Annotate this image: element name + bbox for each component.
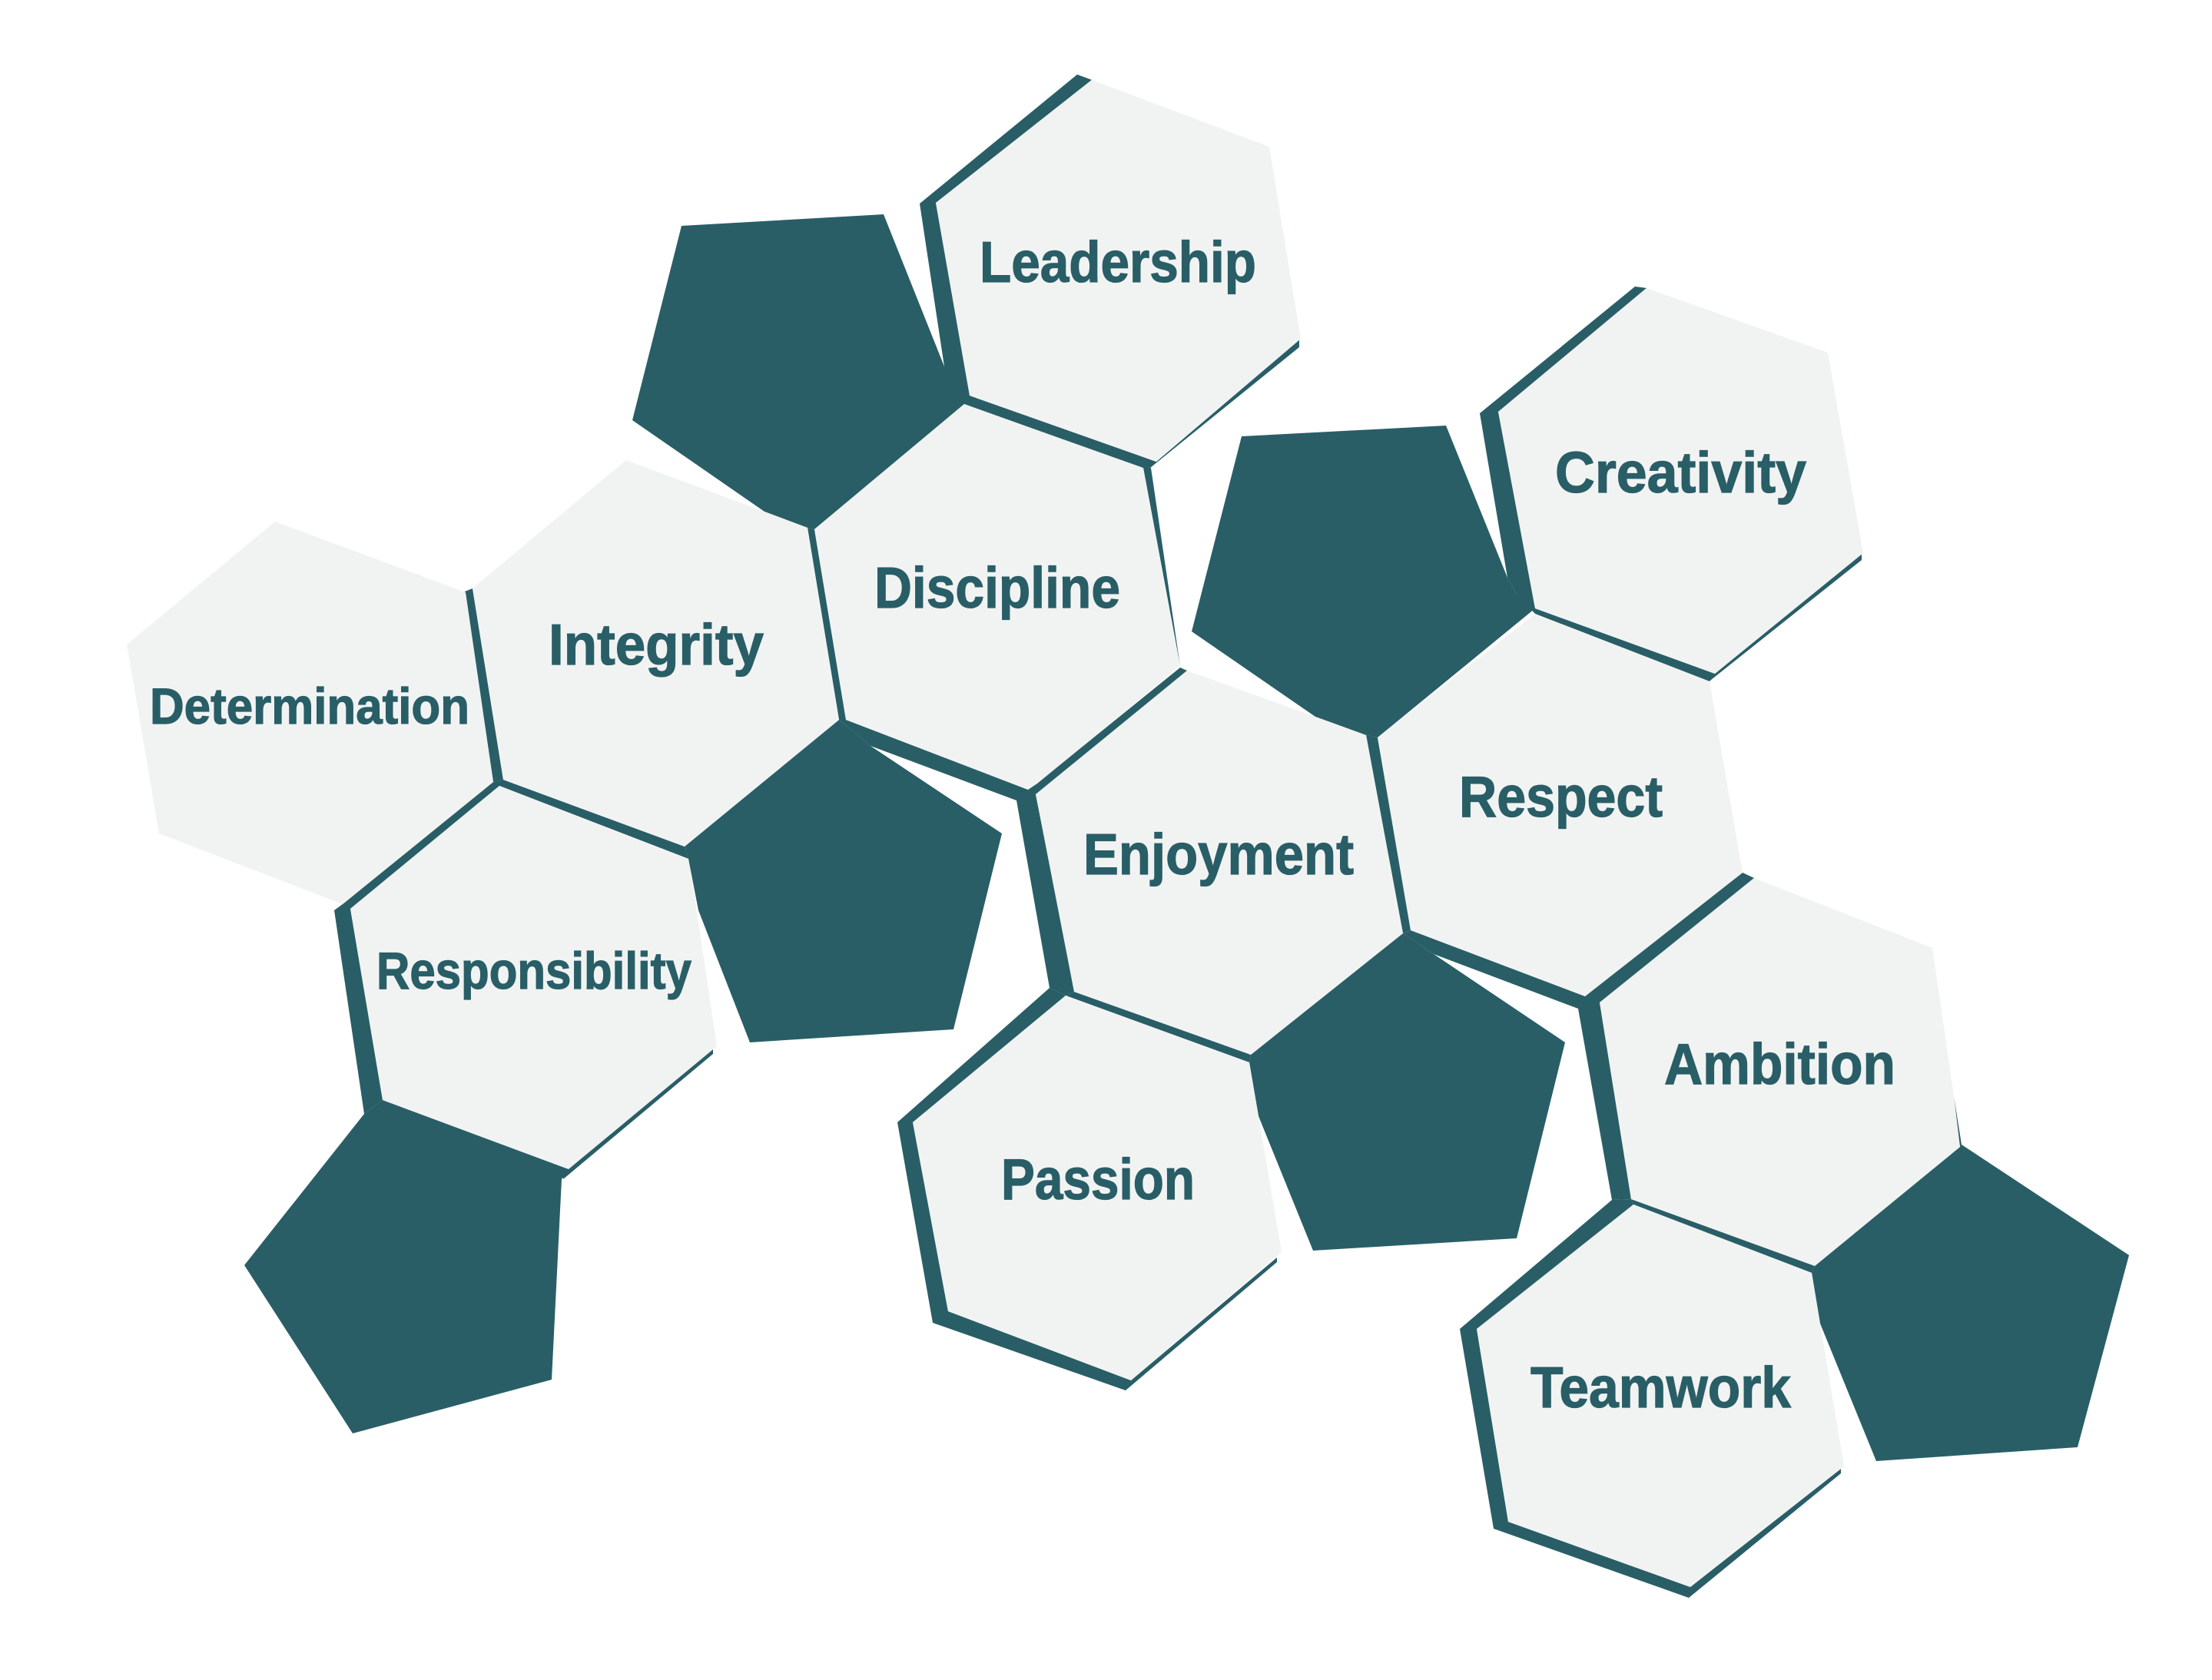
strip: responsibility (334, 780, 688, 1114)
panel: Enjoyment (1036, 671, 1403, 1055)
strip: discipline right (1143, 468, 1180, 666)
panel: Teamwork: Teamwork (1530, 1355, 1791, 1420)
strip: respect bottom (1403, 930, 1600, 1009)
strip: discipline bottom (839, 720, 1036, 800)
panel: Determination: Determination (150, 678, 469, 734)
panel: Creativity: Creativity (1555, 440, 1806, 505)
panel: Teamwork (1477, 1204, 1844, 1587)
dark pentagons (244, 214, 2129, 1461)
panel: Integrity (473, 460, 839, 847)
pentagon: below responsibility (244, 1100, 569, 1433)
panel: Discipline (814, 404, 1180, 790)
panel: Enjoyment: Enjoyment (1083, 822, 1354, 886)
pentagon: upper centre (1192, 426, 1535, 737)
panel: Leadership (936, 80, 1301, 462)
strip: teamwork (1460, 1199, 1841, 1598)
panel: Ambition: Ambition (1664, 1032, 1895, 1096)
strip: enjoyment respect divider (1366, 735, 1411, 933)
strip: creativity (1480, 287, 1862, 681)
panel: Integrity: Integrity (549, 612, 764, 677)
panel: Passion (913, 996, 1282, 1380)
strip: ambition (1578, 873, 1754, 1200)
panel: Determination (127, 522, 493, 904)
panel: Ambition (1600, 878, 1960, 1266)
strip: integrity discipline divider (808, 528, 846, 720)
panel: Creativity (1498, 288, 1863, 674)
pentagon: top left (632, 214, 970, 529)
panel: Respect: Respect (1459, 764, 1663, 829)
strip: responsibility lower right (562, 1049, 713, 1179)
panel: Responsibility (350, 786, 717, 1169)
dark hexagon edge strips (334, 75, 1962, 1598)
pentagon: bottom right (1812, 1145, 2129, 1461)
strip: ambition bottom line (1631, 1199, 1815, 1273)
strip: leadership (920, 75, 1299, 469)
panel: Responsibility: Responsibility (376, 942, 691, 1000)
panel: Discipline: Discipline (874, 555, 1120, 620)
panel: Respect (1378, 614, 1743, 996)
pentagon: below integrity (685, 720, 1002, 1042)
panel: Leadership: Leadership (980, 230, 1256, 294)
strip: enjoyment bottom line (1066, 992, 1251, 1062)
strip: passion (897, 988, 1277, 1390)
strip: enjoyment (1016, 668, 1187, 996)
panel: Passion: Passion (1001, 1147, 1195, 1211)
pentagon: below enjoyment (1249, 933, 1565, 1251)
strip: integrity left (465, 588, 503, 782)
strip: ambition right wedge (1954, 1096, 1962, 1147)
